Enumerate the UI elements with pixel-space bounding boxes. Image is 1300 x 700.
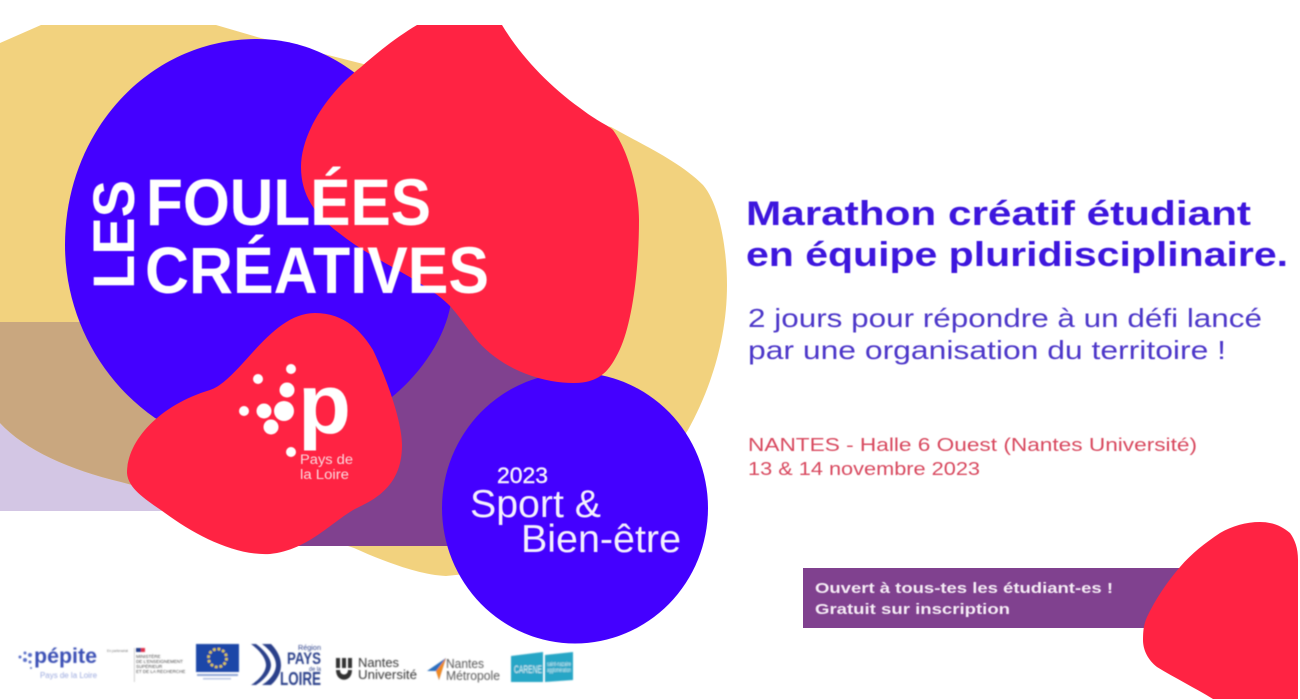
logo: Région Pays de la Loire: Région [298, 645, 321, 652]
logo: Région Pays de la Loire [251, 644, 322, 689]
logo: Pépite Pays de la Loire [239, 357, 353, 482]
theme label: 2023 Sport & Bien-être [470, 463, 681, 561]
logo: Nantes Métropole: Métropole [446, 668, 500, 683]
lavender band [0, 322, 200, 511]
theme line 1: Sport & [470, 483, 601, 526]
small blue circle [442, 372, 708, 644]
subheading line 2: par une organisation du territoire ! [748, 335, 1226, 365]
partner logos [18, 644, 573, 689]
small red blob [127, 313, 402, 554]
large blue circle [65, 39, 452, 440]
purple band [270, 305, 560, 546]
logo: ministère [107, 648, 185, 682]
logo: Nantes Université: Nantes [358, 655, 399, 670]
logo caption: Pays de [300, 452, 353, 467]
logo: Nantes Métropole [427, 656, 500, 683]
callout banner [803, 522, 1298, 699]
location and date [748, 435, 1197, 479]
heading line 1: Marathon créatif étudiant [746, 195, 1251, 233]
logo: Région Pays de la Loire: PAYS [287, 649, 321, 668]
banner text: Ouvert à tous-tes les étudiant-es ! [815, 580, 1113, 597]
logo letter p: p [298, 357, 351, 451]
logo: CARENE: agglomération [547, 668, 571, 674]
subheading [748, 303, 1262, 365]
logo: ministère: SUPÉRIEUR [136, 663, 163, 669]
logo: ministère: En partenariat [107, 648, 129, 653]
logo: pépite: pépite [34, 645, 97, 668]
logo: Nantes Université: Université [358, 667, 417, 682]
logo caption: la Loire [300, 467, 349, 482]
banner text [815, 580, 1113, 618]
subheading line 1: 2 jours pour répondre à un défi lancé [748, 303, 1262, 333]
logo: Nantes Université [336, 655, 417, 682]
logo: pépite [18, 645, 98, 680]
date: 13 & 14 novembre 2023 [748, 459, 980, 479]
banner text: Gratuit sur inscription [815, 601, 1010, 618]
heading [746, 195, 1288, 274]
corner red blob [1143, 522, 1298, 699]
logo: pépite: Pays de la Loire [40, 671, 98, 680]
logo: European Union flag [196, 644, 239, 680]
heading line 2: en équipe pluridisciplinaire. [746, 236, 1288, 274]
logo: ministère: DE L'ENSEIGNEMENT [136, 659, 183, 664]
year: 2023 [497, 463, 548, 488]
title word: LES: LES [82, 180, 147, 289]
logo dots [239, 364, 296, 457]
banner background [803, 568, 1203, 628]
logo: ministère: MINISTÈRE [136, 653, 161, 659]
background shapes [0, 25, 727, 644]
location: NANTES - Halle 6 Ouest (Nantes Université) [748, 435, 1197, 455]
logo: Nantes Métropole: Nantes [446, 656, 484, 671]
logo: CARENE: saint-nazaire [547, 662, 571, 668]
title word: CRÉATIVES: CRÉATIVES [145, 233, 489, 307]
title word: FOULÉES: FOULÉES [146, 165, 431, 239]
logo: Région Pays de la Loire: LOIRE [280, 669, 321, 689]
yellow blob [0, 25, 727, 576]
logo: ministère: ET DE LA RECHERCHE [136, 669, 185, 674]
large red blob [301, 25, 639, 383]
title: Les Foulées Créatives [82, 165, 489, 307]
theme line 2: Bien-être [521, 518, 681, 561]
logo: Région Pays de la Loire: de la [309, 667, 322, 673]
logo: CARENE: CARENE [514, 664, 542, 676]
tan overlap of yellow blob and band [0, 322, 156, 485]
logo: CARENE [511, 652, 573, 682]
